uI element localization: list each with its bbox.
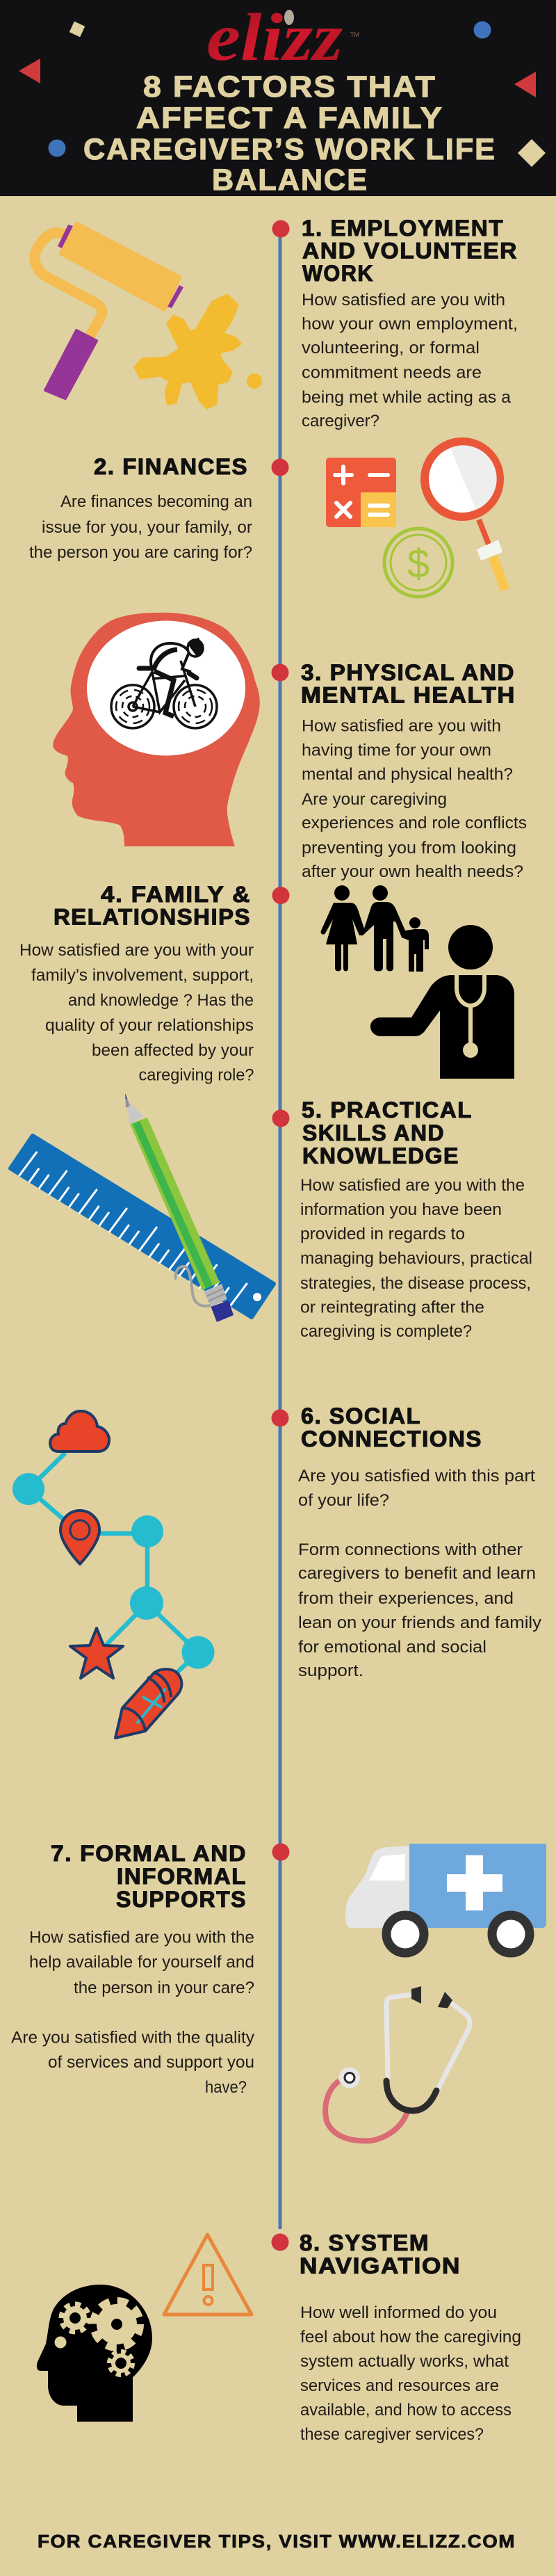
body text 8: feel about how the caregiving bbox=[300, 2328, 521, 2346]
icon: stethoscope bbox=[325, 1986, 470, 2141]
timeline dot 8 bbox=[271, 2234, 289, 2251]
timeline line bbox=[278, 229, 282, 2229]
body text 3 bbox=[302, 716, 527, 881]
heading 3 bbox=[301, 660, 516, 708]
heading 8: 8. SYSTEM bbox=[300, 2230, 430, 2255]
icon: head with gears bbox=[37, 2285, 152, 2422]
decorative shapes bbox=[19, 19, 546, 167]
heading 6: 6. SOCIAL bbox=[301, 1403, 421, 1428]
timeline dot 5 bbox=[272, 1110, 289, 1127]
title bbox=[83, 70, 496, 197]
body text 3: How satisfied are you with bbox=[302, 716, 501, 736]
heading 5 bbox=[302, 1097, 473, 1168]
body text 6: Form connections with other bbox=[298, 1540, 523, 1559]
body text 4: How satisfied are you with your bbox=[19, 941, 254, 960]
icon: star bbox=[70, 1628, 123, 1678]
body text 1: volunteering, or formal bbox=[302, 339, 480, 357]
heading 7 bbox=[51, 1841, 247, 1912]
header banner bbox=[0, 0, 556, 197]
icon: map pin bbox=[60, 1511, 99, 1564]
icon: ruler bbox=[10, 1136, 274, 1317]
heading 4: 4. FAMILY & bbox=[101, 882, 251, 907]
heading 8: NAVIGATION bbox=[300, 2253, 461, 2278]
body text 3: mental and physical health? bbox=[302, 765, 513, 784]
body text 3: having time for your own bbox=[302, 741, 491, 759]
icon: cyclist bbox=[111, 639, 217, 728]
body text 3: Are your caregiving bbox=[302, 790, 447, 809]
timeline dot 7 bbox=[272, 1843, 289, 1861]
body text 8 bbox=[300, 2303, 521, 2444]
timeline dot 2 bbox=[271, 459, 289, 476]
body text 8: How well informed do you bbox=[300, 2303, 497, 2322]
heading 2: 2. FINANCES bbox=[94, 454, 248, 479]
heading 1: AND VOLUNTEER bbox=[302, 238, 518, 263]
heading 3: 3. PHYSICAL AND bbox=[301, 660, 515, 685]
body text 1: how your own employment, bbox=[302, 314, 518, 334]
body text 8: available, and how to access bbox=[300, 2401, 512, 2420]
heading 4: RELATIONSHIPS bbox=[54, 904, 251, 929]
body text 7: Are you satisfied with the quality bbox=[11, 2028, 254, 2047]
heading 6: CONNECTIONS bbox=[301, 1426, 482, 1451]
body text 8: services and resources are bbox=[300, 2376, 499, 2395]
icon: cloud bbox=[50, 1411, 109, 1451]
body text 5: caregiving is complete? bbox=[300, 1322, 472, 1341]
body text 5: strategies, the disease process, bbox=[300, 1274, 531, 1293]
body text 8: system actually works, what bbox=[300, 2352, 509, 2371]
body text 5: or reintegrating after the bbox=[300, 1298, 484, 1317]
timeline dot 1 bbox=[272, 220, 289, 238]
body text 4: caregiving role? bbox=[139, 1065, 254, 1085]
body text 6: for emotional and social bbox=[298, 1638, 486, 1657]
body text 2: the person you are caring for? bbox=[29, 543, 252, 562]
body text 5: managing behaviours, practical bbox=[300, 1249, 532, 1268]
icon: magnifying glass bbox=[420, 437, 505, 590]
panel: 8 system navigation bbox=[37, 2230, 521, 2444]
title: AFFECT A FAMILY bbox=[136, 102, 443, 135]
heading 1: WORK bbox=[302, 261, 374, 286]
body text 1: commitment needs are bbox=[302, 363, 482, 383]
icon: pencil bbox=[125, 1093, 234, 1322]
icon: ambulance bbox=[345, 1844, 546, 1953]
body text 5 bbox=[300, 1176, 532, 1341]
panel: 7 formal and informal supports bbox=[11, 1841, 546, 2141]
body text 4 bbox=[19, 941, 254, 1085]
timeline dot 3 bbox=[271, 663, 289, 682]
body text 2 bbox=[29, 492, 252, 562]
body text 7: the person in your care? bbox=[74, 1979, 254, 1997]
footer call to action: FOR CAREGIVER TIPS, VISIT WWW.ELIZZ.COM bbox=[38, 2531, 516, 2552]
icon: doctor with stethoscope bbox=[370, 925, 514, 1079]
body text 2: Are finances becoming an bbox=[60, 492, 252, 511]
icon: dollar coin: $ bbox=[407, 541, 430, 586]
body text 4: family’s involvement, support, bbox=[31, 966, 254, 985]
body text 6: caregivers to benefit and learn bbox=[298, 1564, 536, 1583]
body text 4: been affected by your bbox=[92, 1041, 254, 1060]
logo: elizz: elizz bbox=[206, 0, 343, 75]
body text 2: issue for you, your family, or bbox=[42, 518, 252, 537]
icon: family silhouette bbox=[321, 885, 429, 972]
logo: elizz: TM bbox=[350, 31, 359, 38]
icon: pencil bbox=[115, 1669, 181, 1738]
timeline dot 6 bbox=[271, 1409, 289, 1427]
body text 5: How satisfied are you with the bbox=[300, 1176, 525, 1195]
network diagram bbox=[13, 1411, 214, 1738]
panel: 4 family and relationships bbox=[19, 882, 514, 1085]
body text 6: from their experiences, and bbox=[298, 1589, 514, 1608]
body text 6: support. bbox=[298, 1661, 363, 1680]
body text 1 bbox=[302, 291, 518, 430]
heading 3: MENTAL HEALTH bbox=[301, 683, 516, 708]
panel: 5 practical skills and knowledge bbox=[10, 1093, 532, 1341]
timeline dot 4 bbox=[272, 887, 289, 904]
panel: 2 finances bbox=[29, 437, 505, 597]
body text 3: after your own health needs? bbox=[302, 862, 523, 881]
body text 7: How satisfied are you with the bbox=[29, 1928, 254, 1947]
panel: 6 social connections bbox=[13, 1403, 541, 1738]
heading 7: INFORMAL bbox=[117, 1864, 247, 1889]
heading 7: 7. FORMAL AND bbox=[51, 1841, 247, 1866]
body text 6 bbox=[298, 1467, 541, 1680]
heading 5: 5. PRACTICAL bbox=[302, 1097, 473, 1122]
body text 7: of services and support you bbox=[48, 2053, 254, 2072]
body text 5: provided in regards to bbox=[300, 1225, 465, 1243]
body text 4: quality of your relationships bbox=[45, 1016, 254, 1035]
body text 5: information you have been bbox=[300, 1200, 502, 1219]
body text 7 bbox=[11, 1928, 254, 2097]
icon: dollar coin bbox=[384, 529, 452, 597]
panel: 1 employment and volunteer work bbox=[35, 216, 518, 430]
panel: 3 physical and mental health bbox=[53, 613, 527, 881]
heading 6 bbox=[301, 1403, 482, 1451]
heading 4 bbox=[54, 882, 251, 929]
icon: calculator bbox=[326, 458, 396, 527]
body text 3: experiences and role conflicts bbox=[302, 814, 527, 832]
body text 6: lean on your friends and family bbox=[298, 1613, 541, 1632]
heading 1 bbox=[302, 216, 518, 286]
body text 6: Are you satisfied with this part bbox=[298, 1467, 535, 1486]
heading 1: 1. EMPLOYMENT bbox=[302, 216, 504, 241]
title: CAREGIVER’S WORK LIFE bbox=[83, 133, 496, 166]
body text 6: of your life? bbox=[298, 1491, 389, 1510]
body text 7: have? bbox=[205, 2078, 247, 2097]
icon: warning triangle bbox=[164, 2235, 252, 2315]
icon: head silhouette with cyclist bbox=[53, 613, 260, 846]
title: 8 FACTORS THAT bbox=[143, 70, 436, 104]
body text 4: and knowledge ? Has the bbox=[68, 991, 254, 1010]
heading 8 bbox=[300, 2230, 461, 2278]
body text 1: being met while acting as a bbox=[302, 388, 512, 407]
heading 7: SUPPORTS bbox=[116, 1887, 247, 1912]
heading 5: SKILLS AND bbox=[302, 1120, 445, 1145]
heading 5: KNOWLEDGE bbox=[302, 1143, 459, 1168]
title: BALANCE bbox=[212, 163, 368, 197]
body text 3: preventing you from looking bbox=[302, 839, 516, 858]
body text 8: these caregiver services? bbox=[300, 2425, 484, 2444]
icon: paint roller and splat bbox=[35, 223, 262, 408]
body text 7: help available for yourself and bbox=[29, 1953, 254, 1972]
body text 1: caregiver? bbox=[302, 412, 379, 430]
body text 1: How satisfied are you with bbox=[302, 291, 505, 309]
